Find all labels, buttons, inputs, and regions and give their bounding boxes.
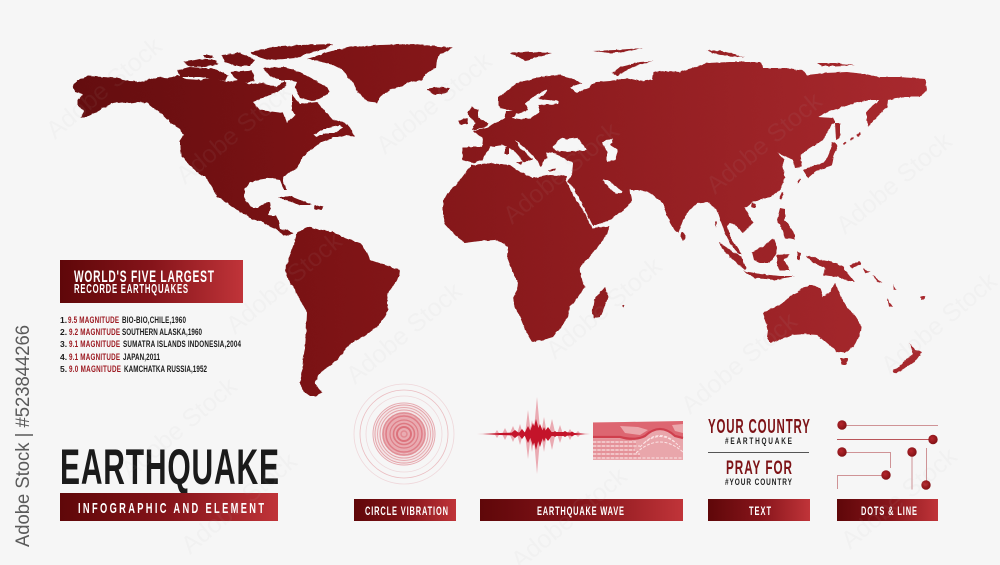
landmass: Japan and north Pacific islands bbox=[797, 123, 861, 184]
landmass: Greenland bbox=[307, 44, 453, 103]
list: largest earthquakes: 9.2 MAGNITUDE bbox=[69, 327, 120, 337]
label: earthquake wave: EARTHQUAKE WAVE bbox=[537, 505, 624, 519]
list: largest earthquakes: 3. bbox=[60, 339, 67, 349]
list: largest earthquakes: 1. bbox=[60, 315, 67, 325]
landmass: Australia bbox=[763, 283, 862, 353]
landmass: New Zealand bbox=[893, 343, 922, 374]
list: largest earthquakes: JAPAN,2011 bbox=[123, 352, 161, 362]
landmass: Africa bbox=[443, 163, 610, 342]
heading panel: world's five largest: WORLD'S FIVE LARGEST bbox=[74, 268, 214, 286]
watermarks: Adobe Stock bbox=[836, 442, 963, 555]
element: text samples: PRAY FOR bbox=[726, 457, 792, 479]
landmass: British Isles bbox=[458, 107, 488, 130]
list: largest earthquakes: BIO-BIO,CHILE,1960 bbox=[122, 315, 186, 325]
label: circle vibration bbox=[354, 499, 456, 521]
watermarks: Adobe Stock bbox=[341, 277, 468, 390]
watermarks: Adobe Stock bbox=[176, 447, 303, 560]
landmass: small Pacific islands bbox=[622, 284, 926, 308]
element: dots and lines bbox=[837, 420, 938, 490]
Gulf of California bbox=[201, 176, 217, 197]
watermarks: Adobe Stock bbox=[541, 252, 668, 365]
label: earthquake wave bbox=[480, 499, 683, 521]
list: largest earthquakes: KAMCHATKA RUSSIA,1952 bbox=[124, 364, 207, 374]
watermarks: Adobe Stock bbox=[831, 127, 958, 240]
landmass: Mediterranean islands bbox=[505, 147, 556, 171]
list: largest earthquakes: SOUTHERN ALASKA,1960 bbox=[122, 327, 202, 337]
element: earthquake wave bbox=[477, 397, 590, 474]
label: dots and line bbox=[837, 499, 938, 521]
list: largest earthquakes: 9.1 MAGNITUDE bbox=[69, 339, 120, 349]
list: largest earthquakes bbox=[60, 315, 242, 374]
watermarks: Adobe Stock bbox=[701, 87, 828, 200]
subtitle banner: INFOGRAPHIC AND ELEMENT bbox=[78, 500, 264, 517]
element: text samples: YOUR COUNTRY bbox=[708, 414, 810, 438]
watermarks: Adobe Stock bbox=[498, 117, 625, 230]
landmass: Sri Lanka bbox=[680, 232, 686, 240]
label: text bbox=[708, 499, 810, 521]
landmass: southeast Asian islands bbox=[715, 192, 801, 280]
element: circle vibration bbox=[354, 384, 454, 484]
world map bbox=[73, 44, 927, 396]
landmass: arctic islands of Eurasia bbox=[510, 48, 855, 76]
landmass: Iceland bbox=[427, 87, 450, 95]
list: largest earthquakes: 9.0 MAGNITUDE bbox=[69, 364, 121, 374]
Baltic Sea bbox=[512, 89, 558, 119]
label: circle vibration: CIRCLE VIBRATION bbox=[365, 505, 448, 519]
subtitle banner bbox=[60, 493, 278, 521]
element: text samples: #YOUR COUNTRY bbox=[725, 477, 793, 487]
watermarks: Adobe Stock bbox=[116, 372, 243, 485]
watermarks: Adobe Stock bbox=[171, 77, 298, 190]
list: largest earthquakes: 5. bbox=[60, 364, 67, 374]
landmass: Tasmania bbox=[840, 358, 848, 365]
landmass: North America bbox=[73, 75, 355, 236]
element: text samples: #EARTHQUAKE bbox=[725, 436, 792, 446]
list: largest earthquakes: 9.5 MAGNITUDE bbox=[68, 315, 119, 325]
side credit: Adobe Stock | #523844266 bbox=[13, 325, 34, 547]
label: dots and line: DOTS & LINE bbox=[861, 505, 917, 519]
Black Sea bbox=[553, 138, 587, 152]
watermarks: Adobe Stock bbox=[41, 32, 168, 145]
list: largest earthquakes: 9.1 MAGNITUDE bbox=[69, 352, 120, 362]
element: text samples bbox=[708, 414, 810, 487]
watermarks: Adobe Stock bbox=[221, 227, 348, 340]
list: largest earthquakes: 2. bbox=[60, 327, 67, 337]
title: EARTHQUAKE bbox=[60, 439, 279, 495]
Persian Gulf bbox=[603, 180, 623, 194]
inland seas and gulfs bbox=[201, 80, 623, 197]
landmass: Madagascar bbox=[592, 287, 608, 318]
list: largest earthquakes: SUMATRA ISLANDS INDONESIA,2004 bbox=[123, 339, 242, 349]
Gulf of Saint Lawrence bbox=[314, 125, 343, 137]
watermarks: Adobe Stock bbox=[676, 307, 803, 420]
landmass: South America bbox=[285, 227, 400, 396]
landmass: Eurasia bbox=[462, 62, 927, 254]
landmass: Caribbean islands bbox=[278, 196, 323, 210]
heading panel: world's five largest: RECORDE EARTHQUAKES bbox=[74, 283, 188, 297]
landmass: Canadian arctic islands bbox=[177, 44, 333, 101]
watermarks: Adobe Stock bbox=[876, 267, 1000, 380]
label: text: TEXT bbox=[749, 505, 771, 519]
landmass: New Guinea bbox=[805, 255, 883, 283]
Hudson Bay bbox=[253, 80, 297, 123]
heading panel: world's five largest bbox=[60, 260, 243, 303]
list: largest earthquakes: 4. bbox=[60, 352, 67, 362]
element: moire wave pattern bbox=[593, 421, 684, 460]
watermarks: Adobe Stock bbox=[371, 47, 498, 160]
Caspian Sea bbox=[602, 138, 618, 162]
